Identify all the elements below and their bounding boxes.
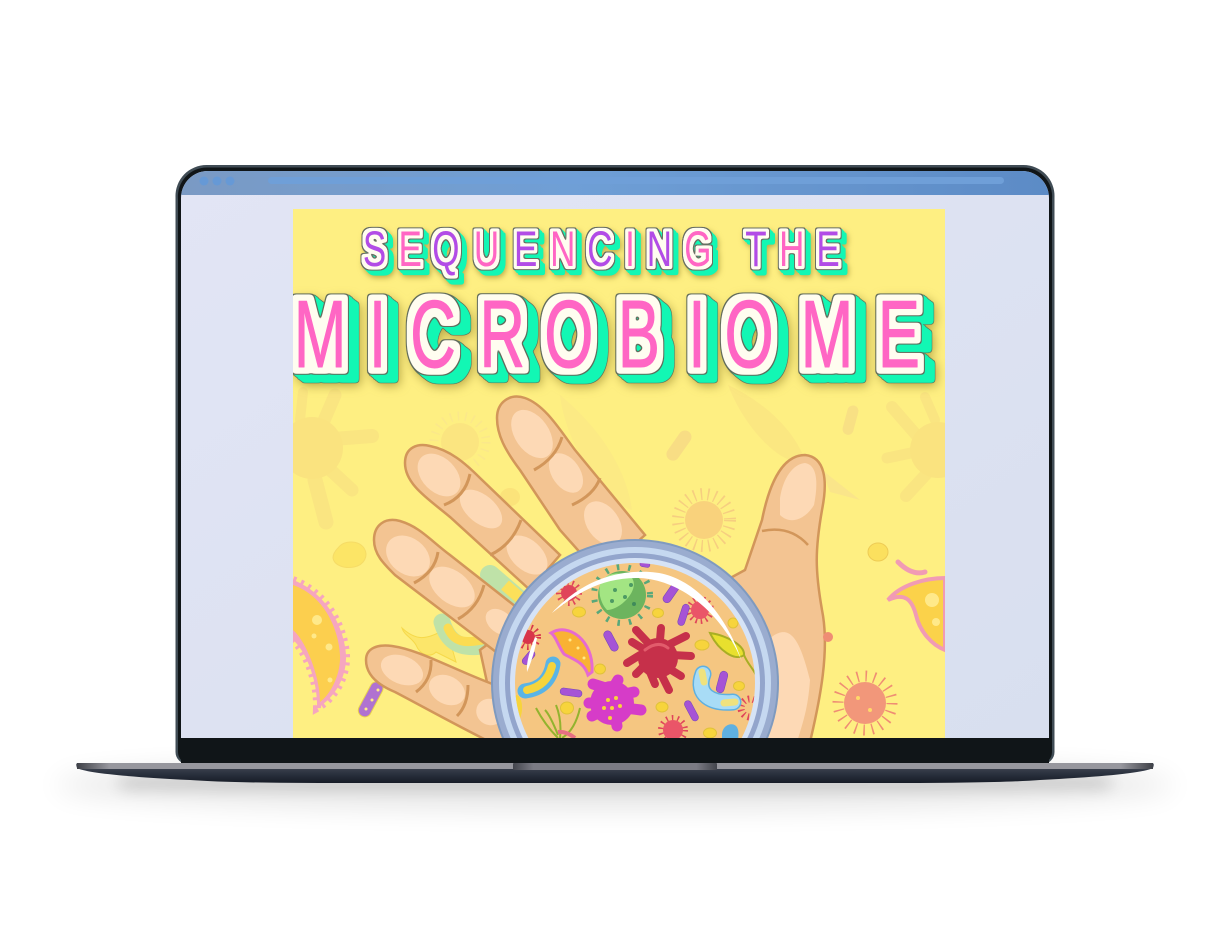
germ: pink sun [838, 676, 892, 730]
germ: blue small [722, 724, 738, 742]
germ: purple pill [358, 682, 384, 718]
title line 1: SEQ U E NC ING THE [363, 222, 840, 278]
petri dish [491, 539, 779, 738]
germ: green virus [594, 567, 650, 623]
germ: orange sun [678, 494, 730, 546]
germ: yellow bean [868, 543, 888, 561]
infographic panel [293, 209, 945, 738]
germ: pink right [689, 599, 711, 621]
germ: red left [518, 627, 538, 647]
faded background germs [281, 385, 966, 568]
germ: small red top-left [559, 583, 579, 603]
germ: purple pills [521, 561, 729, 722]
screen [181, 171, 1049, 738]
germ: plant [536, 705, 580, 738]
germ: magenta blob [589, 680, 641, 726]
germ: yellow and blue worm [525, 664, 553, 691]
palm and thumb [480, 455, 825, 742]
hand [366, 397, 825, 742]
germ: big red [627, 628, 691, 690]
dish contents [515, 561, 759, 742]
germ: yellow left edge [515, 695, 522, 718]
ring finger [374, 520, 520, 655]
title [294, 222, 920, 388]
laptop lid [175, 165, 1055, 764]
side germ on thumb [823, 632, 833, 642]
germ: blue curl [701, 672, 735, 703]
middle finger [405, 445, 560, 590]
laptop chin [181, 738, 1049, 763]
germ: left paisley [293, 580, 346, 708]
germ: lime teardrop [710, 633, 757, 678]
germ: paisley [551, 630, 592, 675]
pinky finger [366, 646, 510, 742]
hinge notch [513, 763, 717, 770]
germ: yellow beans [560, 607, 744, 738]
glass highlights [527, 572, 742, 672]
germ: right crescent [888, 562, 945, 650]
germ: yellow splat [402, 628, 456, 662]
laptop base [76, 763, 1154, 783]
laptop mockup with infographic [76, 165, 1154, 815]
index finger [496, 395, 647, 552]
germ: green worm [442, 575, 525, 647]
dish rim [491, 539, 779, 738]
browser bar [181, 171, 1049, 198]
laptop shadow [55, 761, 1175, 809]
title line 2: MICROBIOME [294, 281, 920, 388]
germ: lower reds [661, 699, 759, 742]
